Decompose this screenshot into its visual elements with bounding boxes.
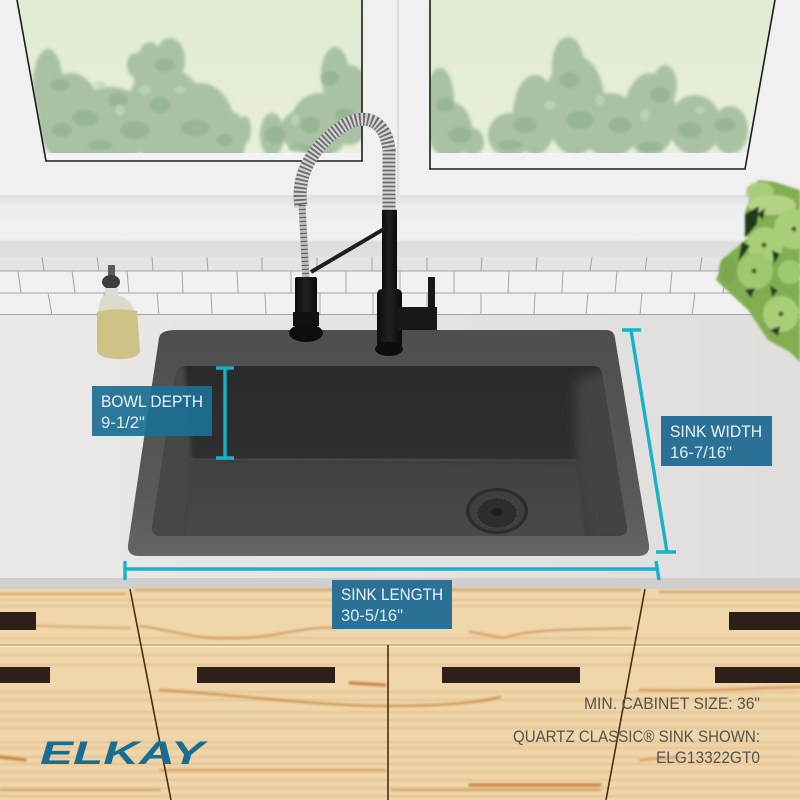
cabinet handles (0, 612, 800, 683)
sink bowl (140, 366, 640, 540)
bowl depth measure (216, 368, 234, 458)
dimension: sink width (622, 330, 772, 552)
spray faucet (289, 119, 437, 356)
model note (513, 727, 760, 767)
spring hose (300, 119, 389, 212)
dimension: bowl depth (92, 368, 234, 458)
soap bottle (97, 265, 140, 359)
sink width label: SINK WIDTH (670, 422, 762, 441)
Elkay logo: ELKAY (40, 735, 208, 771)
sink length label: SINK LENGTH (341, 585, 443, 604)
sink length measure (125, 561, 659, 580)
bowl depth label (92, 386, 212, 436)
model note: ELG13322GT0 (656, 748, 760, 767)
right window view (426, 0, 775, 169)
sink width measure (622, 330, 676, 552)
left window view (17, 0, 372, 167)
dimension: sink length (125, 561, 659, 629)
faucet body (382, 210, 397, 292)
wood cabinets (0, 589, 800, 800)
sink width label (661, 416, 772, 466)
cabinet size note: MIN. CABINET SIZE: 36" (584, 694, 760, 713)
sink width label: 16-7/16" (670, 443, 732, 462)
tile backsplash (0, 257, 800, 318)
sink (128, 330, 649, 556)
bowl depth label: BOWL DEPTH (101, 392, 203, 411)
countertop (0, 315, 800, 590)
sink length label (332, 580, 452, 629)
sink length label: 30-5/16" (341, 606, 403, 625)
drain (466, 488, 528, 534)
potted plant (716, 180, 800, 362)
window frame and wall (0, 0, 800, 258)
model note: QUARTZ CLASSIC® SINK SHOWN: (513, 727, 760, 746)
bowl depth label: 9-1/2" (101, 413, 145, 432)
